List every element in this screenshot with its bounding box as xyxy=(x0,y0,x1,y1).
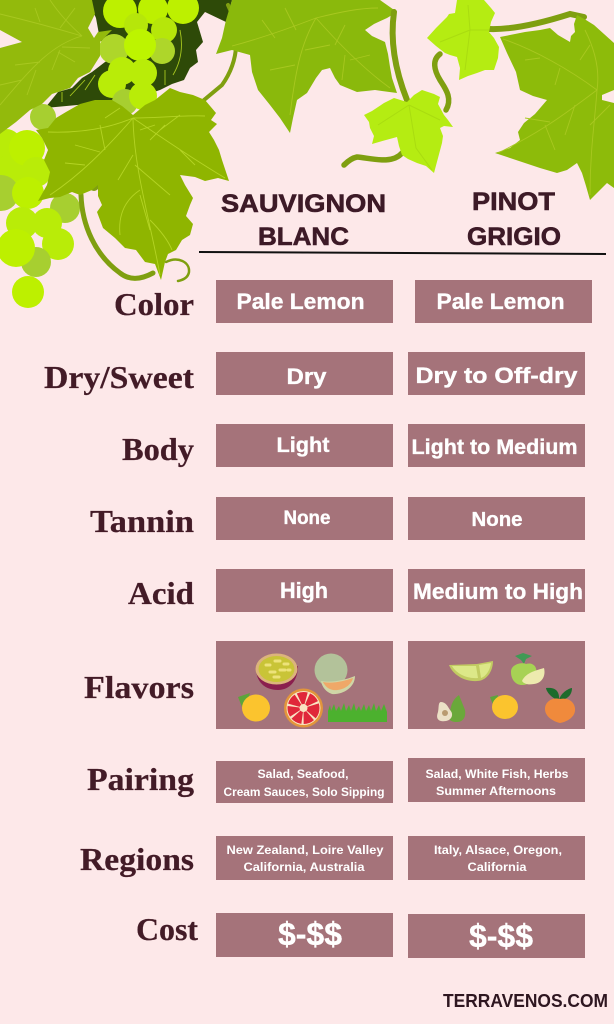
icon: grass xyxy=(328,703,387,722)
icon: pears xyxy=(437,695,465,722)
tendrils at centre xyxy=(344,54,449,165)
row: tannin xyxy=(216,497,585,540)
column heading: Pinot Grigio: PINOT xyxy=(472,188,555,216)
row: regions xyxy=(216,836,585,880)
row: acid xyxy=(216,569,585,612)
column heading: Sauvignon Blanc: BLANC xyxy=(258,223,349,251)
label: Pairing: Pairing xyxy=(87,761,194,797)
row: pairing: Salad, Seafood, xyxy=(258,767,348,781)
icon: lemon xyxy=(238,693,270,722)
stem and curl under front leaf xyxy=(81,181,189,281)
icon: lemon xyxy=(490,695,518,719)
row: regions: Italy, Alsace, Oregon, xyxy=(434,843,562,857)
panel: Sauvignon Blanc flavors xyxy=(216,641,393,729)
icon: green apple xyxy=(511,653,545,685)
row: color xyxy=(216,280,592,323)
row: cost: $-$$ xyxy=(469,918,533,954)
row: dry/sweet: Dry to Off-dry xyxy=(416,363,578,388)
small bright leaf centre xyxy=(364,90,453,173)
grapevine illustration xyxy=(0,0,614,308)
label: Regions: Regions xyxy=(80,841,194,877)
stem to small leaf xyxy=(393,12,407,100)
bright leaf top right xyxy=(427,0,499,80)
label: Tannin: Tannin xyxy=(90,503,194,539)
front leaf xyxy=(36,88,229,280)
label: Body: Body xyxy=(122,431,194,467)
label: Dry/Sweet: Dry/Sweet xyxy=(44,359,194,395)
large leaf right xyxy=(495,15,614,200)
row: body: Light to Medium xyxy=(412,436,578,459)
dark leaf behind grapes xyxy=(45,0,232,108)
column heading: Sauvignon Blanc xyxy=(221,190,386,251)
row: color: Pale Lemon xyxy=(436,289,564,314)
label: Cost: Cost xyxy=(136,911,198,947)
top centre leaf xyxy=(216,0,397,133)
column heading: Pinot Grigio xyxy=(467,188,561,251)
column heading: Sauvignon Blanc: SAUVIGNON xyxy=(221,190,386,218)
row: regions: California xyxy=(468,860,527,874)
label: Flavors: Flavors xyxy=(84,669,194,705)
row: dry/sweet xyxy=(216,352,585,395)
row: pairing: Cream Sauces, Solo Sipping xyxy=(224,785,384,799)
row: body: Light xyxy=(276,434,330,457)
icon: grapefruit xyxy=(284,688,323,728)
row: dry/sweet: Dry xyxy=(286,364,327,389)
top grape cluster xyxy=(98,0,199,115)
row: pairing: Salad, White Fish, Herbs xyxy=(426,767,569,781)
row: tannin: None xyxy=(472,509,522,531)
stem top right xyxy=(489,14,584,29)
label: Color: Color xyxy=(114,286,194,322)
stem behind centre leaf xyxy=(204,5,236,100)
column heading: Pinot Grigio: GRIGIO xyxy=(467,223,561,251)
footer: source: TERRAVENOS.COM xyxy=(443,991,608,1011)
row: acid: Medium to High xyxy=(413,579,583,604)
icon: peach xyxy=(545,688,575,723)
row: cost: $-$$ xyxy=(278,916,342,952)
row: regions: New Zealand, Loire Valley xyxy=(226,843,384,857)
row: regions: California, Australia xyxy=(244,860,365,874)
row: cost xyxy=(216,913,585,958)
row: acid: High xyxy=(280,578,328,603)
row labels xyxy=(44,286,198,947)
row: pairing xyxy=(216,758,585,803)
icon: melon xyxy=(314,654,355,694)
header rule xyxy=(199,252,606,254)
icon: passion fruit xyxy=(256,654,298,690)
bottom grape cluster xyxy=(0,104,80,308)
row: pairing: Summer Afternoons xyxy=(436,784,556,798)
icon: lime slices xyxy=(449,661,493,681)
panel: Pinot Grigio flavors xyxy=(408,641,585,729)
row: color: Pale Lemon xyxy=(236,289,364,314)
row: body xyxy=(216,424,585,467)
label: Acid: Acid xyxy=(128,575,194,611)
row: tannin: None xyxy=(284,508,330,529)
top left leaf xyxy=(0,0,112,134)
